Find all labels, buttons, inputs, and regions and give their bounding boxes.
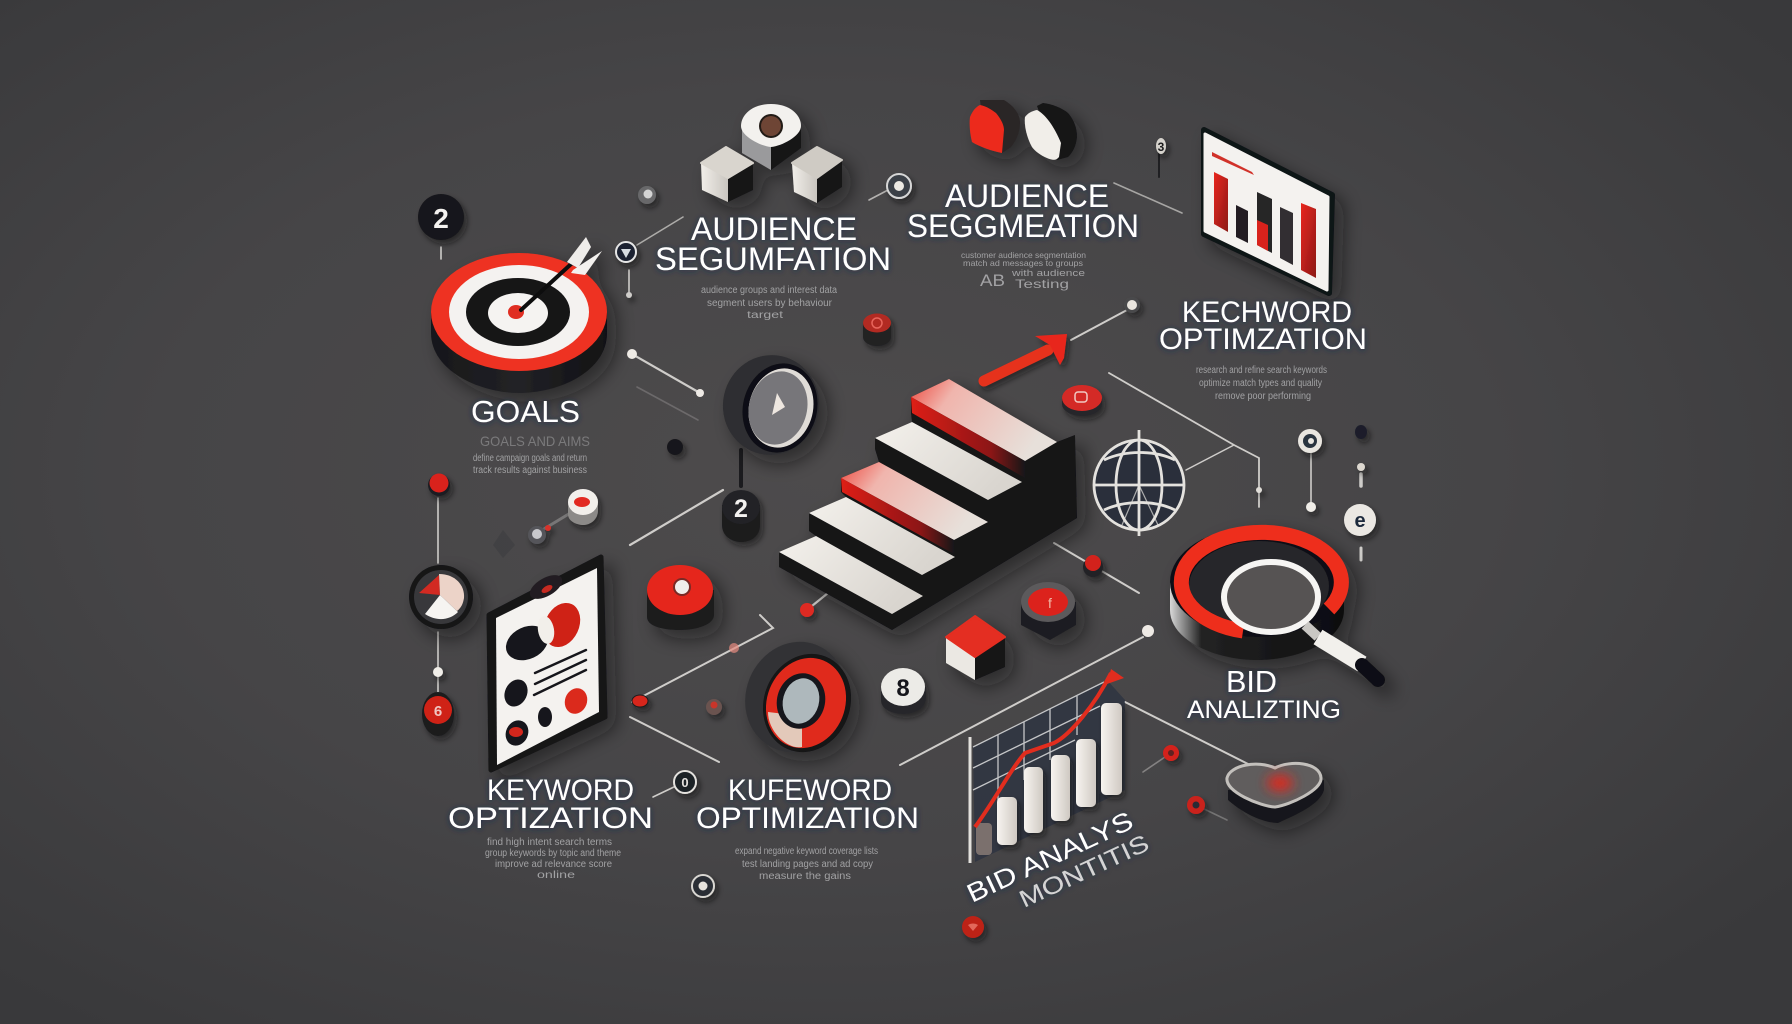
badge: number 2 puck: 2 bbox=[734, 495, 748, 523]
puck: red marker bbox=[863, 314, 891, 346]
heading: keyword optimization centre bbox=[696, 774, 919, 835]
token: number 8 bbox=[881, 668, 926, 714]
pie chart icon bbox=[409, 565, 473, 629]
heading: audience segmentation left: AUDIENCE bbox=[691, 211, 857, 247]
magnifier: upper centre bbox=[714, 346, 828, 464]
heading: keyword optimization top right: KECHWORD bbox=[1182, 296, 1352, 329]
node: pink glow bbox=[729, 643, 739, 653]
trend arrow bbox=[1107, 669, 1124, 684]
text block: keyword optimization left bbox=[485, 837, 621, 881]
pin: small number 3 bbox=[1156, 138, 1166, 154]
node: between keyword headings: 0 bbox=[681, 775, 689, 790]
trend line bbox=[975, 673, 1111, 827]
text block: audience segmentation left: audience groups and interest data bbox=[701, 285, 837, 296]
cube: red top bbox=[946, 616, 1005, 680]
pin: small number 3: 3 bbox=[1158, 140, 1165, 154]
node: red dot top left bbox=[428, 474, 450, 496]
white puck bbox=[1025, 103, 1077, 160]
heading: bid analysis monitoring (rotated): MONTITIS bbox=[1015, 830, 1153, 913]
tread 1 bbox=[779, 536, 923, 614]
token: right white: e bbox=[1354, 510, 1366, 532]
heading: bid analyzing: BID bbox=[1226, 664, 1277, 699]
text block: audience segmentation left: segment users by behaviour bbox=[707, 298, 833, 309]
nodes: right column bbox=[1256, 425, 1367, 512]
top cube bbox=[741, 104, 801, 170]
node: between keyword headings bbox=[674, 771, 696, 793]
puck: red topped bbox=[1021, 582, 1076, 640]
puck: tiny red marker bbox=[706, 699, 722, 715]
puck: heart shaped bbox=[1227, 763, 1324, 823]
heading: bid analysis monitoring (rotated): BID ANALYS bbox=[962, 805, 1138, 908]
axis bbox=[968, 737, 972, 863]
bar 4 bbox=[1280, 207, 1293, 265]
ghost diamond bbox=[493, 530, 515, 558]
tread 2 bbox=[809, 497, 955, 575]
text block: keyword optimization left: group keywords by topic and theme bbox=[485, 848, 621, 859]
decorative connectors bbox=[438, 150, 1361, 820]
bar 3 bbox=[1257, 192, 1272, 253]
node: black dot bbox=[667, 439, 683, 455]
clip bbox=[526, 570, 566, 604]
text block: keyword optimization centre: test landing pages and ad copy bbox=[742, 859, 873, 870]
text block: audience segmentation right: match ad messages to groups bbox=[963, 258, 1083, 268]
staircase: central growth icon bbox=[779, 379, 1077, 630]
tread 5 bbox=[911, 379, 1057, 478]
text block: keyword optimization left: online bbox=[537, 870, 576, 881]
node: right of cubes bbox=[887, 174, 911, 198]
clipboard icon bbox=[489, 557, 605, 770]
stair body bbox=[779, 379, 1077, 630]
text block: keyword optimization centre bbox=[735, 846, 878, 882]
puck: red oval bbox=[1062, 385, 1102, 416]
text block: keyword optimization left: find high intent search terms bbox=[487, 837, 612, 848]
token: number 8: 8 bbox=[896, 675, 910, 702]
text block: goals bbox=[473, 433, 590, 476]
arrow: red trend bbox=[984, 334, 1067, 381]
target icon: goals bbox=[431, 237, 607, 393]
node: small grey marker bbox=[638, 186, 656, 204]
faded first bar bbox=[976, 823, 992, 855]
heading: audience segmentation left: SEGUMFATION bbox=[655, 241, 891, 277]
text block: audience segmentation right: customer audience segmentation bbox=[961, 250, 1086, 260]
magnifier with red ring: bid analysis bbox=[1170, 527, 1378, 680]
text block: audience segmentation right: with audience bbox=[1011, 268, 1085, 278]
text block: audience segmentation right bbox=[961, 250, 1086, 291]
nodes: red dots lower right bbox=[1163, 745, 1205, 814]
dial icon bbox=[729, 626, 866, 768]
text lines bbox=[534, 650, 586, 695]
heading: goals: GOALS bbox=[471, 394, 580, 429]
text block: audience segmentation right: Testing bbox=[1015, 277, 1069, 291]
node: bottom centre bbox=[692, 875, 714, 897]
token: right white bbox=[1344, 504, 1376, 536]
heading: bid analyzing: ANALIZTING bbox=[1187, 696, 1341, 724]
badge: number 2 puck bbox=[722, 490, 760, 542]
text block: keyword optimization top right: remove poor performing bbox=[1215, 391, 1311, 402]
globe icon bbox=[1094, 430, 1184, 536]
heading: keyword optimization top right: OPTIMZATION bbox=[1159, 323, 1367, 356]
bar 2 bbox=[1236, 205, 1248, 243]
pucks: red and white top bbox=[970, 100, 1077, 160]
badge: number 2 bbox=[418, 194, 464, 240]
node: upper target connector bbox=[616, 242, 636, 298]
pill graphic bbox=[500, 597, 587, 667]
heading: keyword optimization centre: OPTIMIZATION bbox=[696, 802, 919, 835]
cubes icon: audience segments bbox=[701, 104, 842, 203]
chart header bbox=[1212, 152, 1254, 175]
heading: audience segmentation left bbox=[655, 211, 891, 277]
grid bbox=[973, 682, 1104, 815]
heading: keyword optimization top right bbox=[1159, 296, 1367, 356]
chart panel bbox=[973, 680, 1125, 862]
node and token: lower left column bbox=[422, 667, 454, 736]
badge: number 2: 2 bbox=[433, 203, 449, 234]
left cube bbox=[701, 147, 753, 202]
chart: bid analysis growth bbox=[970, 669, 1125, 863]
node: red step dot bbox=[800, 603, 814, 617]
line end dots bbox=[627, 349, 704, 397]
red puck bbox=[970, 100, 1020, 153]
node: red dot bottom bbox=[962, 916, 984, 938]
line end node bbox=[1142, 625, 1154, 637]
heading: audience segmentation right: SEGGMEATION bbox=[907, 208, 1139, 244]
node and token: lower left column: 6 bbox=[434, 703, 442, 720]
node: arrow end bbox=[1124, 297, 1140, 313]
heading: bid analyzing bbox=[1187, 664, 1341, 724]
bars bbox=[997, 703, 1122, 845]
text block: keyword optimization centre: expand negative keyword coverage lists bbox=[735, 846, 878, 857]
dots bbox=[500, 676, 591, 749]
text block: goals: track results against business bbox=[473, 465, 587, 476]
heading: keyword optimization centre: KUFEWORD bbox=[728, 774, 892, 807]
heading: keyword optimization left: KEYWORD bbox=[487, 774, 634, 807]
heading: bid analysis monitoring (rotated) bbox=[962, 805, 1153, 913]
heading: audience segmentation right bbox=[907, 178, 1139, 244]
text block: audience segmentation left: target bbox=[747, 310, 783, 321]
tablet: bar chart icon bbox=[1204, 130, 1332, 293]
tread 3 bbox=[841, 462, 988, 554]
right cube bbox=[792, 147, 842, 203]
heading: keyword optimization left bbox=[448, 774, 653, 835]
puck: white red token bbox=[568, 489, 598, 525]
heading: keyword optimization left: OPTIZATION bbox=[448, 802, 653, 835]
text block: keyword optimization centre: measure the gains bbox=[759, 871, 851, 882]
text block: keyword optimization top right: optimize match types and quality bbox=[1199, 378, 1322, 389]
node: small lens bbox=[528, 525, 551, 544]
bar 5 bbox=[1301, 203, 1316, 278]
text block: audience segmentation right: AB bbox=[980, 271, 1005, 290]
puck: red topped: f bbox=[1048, 595, 1052, 611]
text block: keyword optimization left: improve ad relevance score bbox=[495, 859, 612, 870]
text block: goals: GOALS AND AIMS bbox=[480, 433, 590, 449]
node: red line start bbox=[632, 695, 648, 707]
text block: keyword optimization top right bbox=[1196, 365, 1327, 402]
text block: goals: define campaign goals and return bbox=[473, 453, 587, 464]
text block: audience segmentation left bbox=[701, 285, 837, 321]
heading: audience segmentation right: AUDIENCE bbox=[945, 178, 1109, 214]
bar 1 bbox=[1214, 172, 1228, 232]
text block: keyword optimization top right: research and refine search keywords bbox=[1196, 365, 1327, 376]
puck: red on connector bbox=[1083, 555, 1103, 577]
tread 4 bbox=[875, 422, 1022, 500]
puck: big red button bbox=[647, 565, 714, 630]
